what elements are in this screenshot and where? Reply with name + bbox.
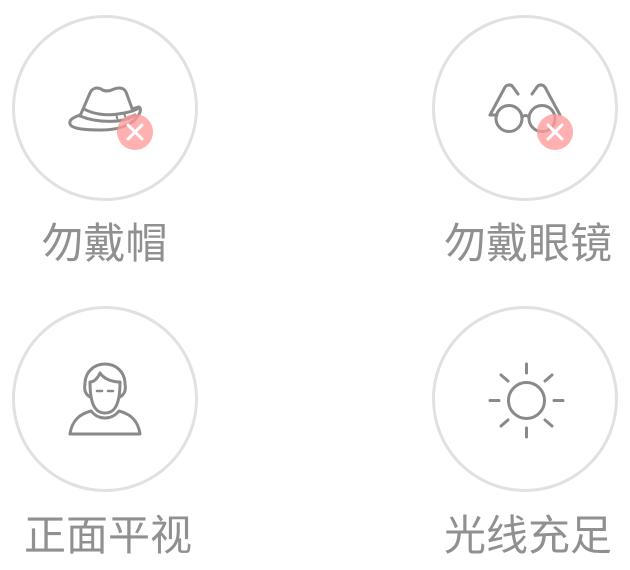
panel: no hat: [14, 16, 196, 267]
icon: prohibited badge: [117, 114, 153, 150]
circle: no hat: [14, 16, 196, 200]
label: no hat: 勿戴帽: [41, 220, 168, 267]
panel: good lighting: [434, 308, 616, 559]
icon: prohibited badge: [537, 114, 573, 150]
label: face forward: 正面平视: [24, 512, 192, 559]
circle: good lighting: [434, 308, 616, 490]
icon: sun: [490, 364, 563, 437]
icon: glasses: [490, 85, 560, 132]
label: good lighting: 光线充足: [444, 512, 612, 559]
circle: face forward: [14, 308, 196, 490]
label: no glasses: 勿戴眼镜: [444, 220, 612, 267]
panel: face forward: [14, 308, 196, 559]
circle: no glasses: [434, 16, 616, 200]
icon: hat: [70, 88, 140, 130]
panel: no glasses: [434, 16, 616, 267]
icon: person: [70, 364, 140, 434]
